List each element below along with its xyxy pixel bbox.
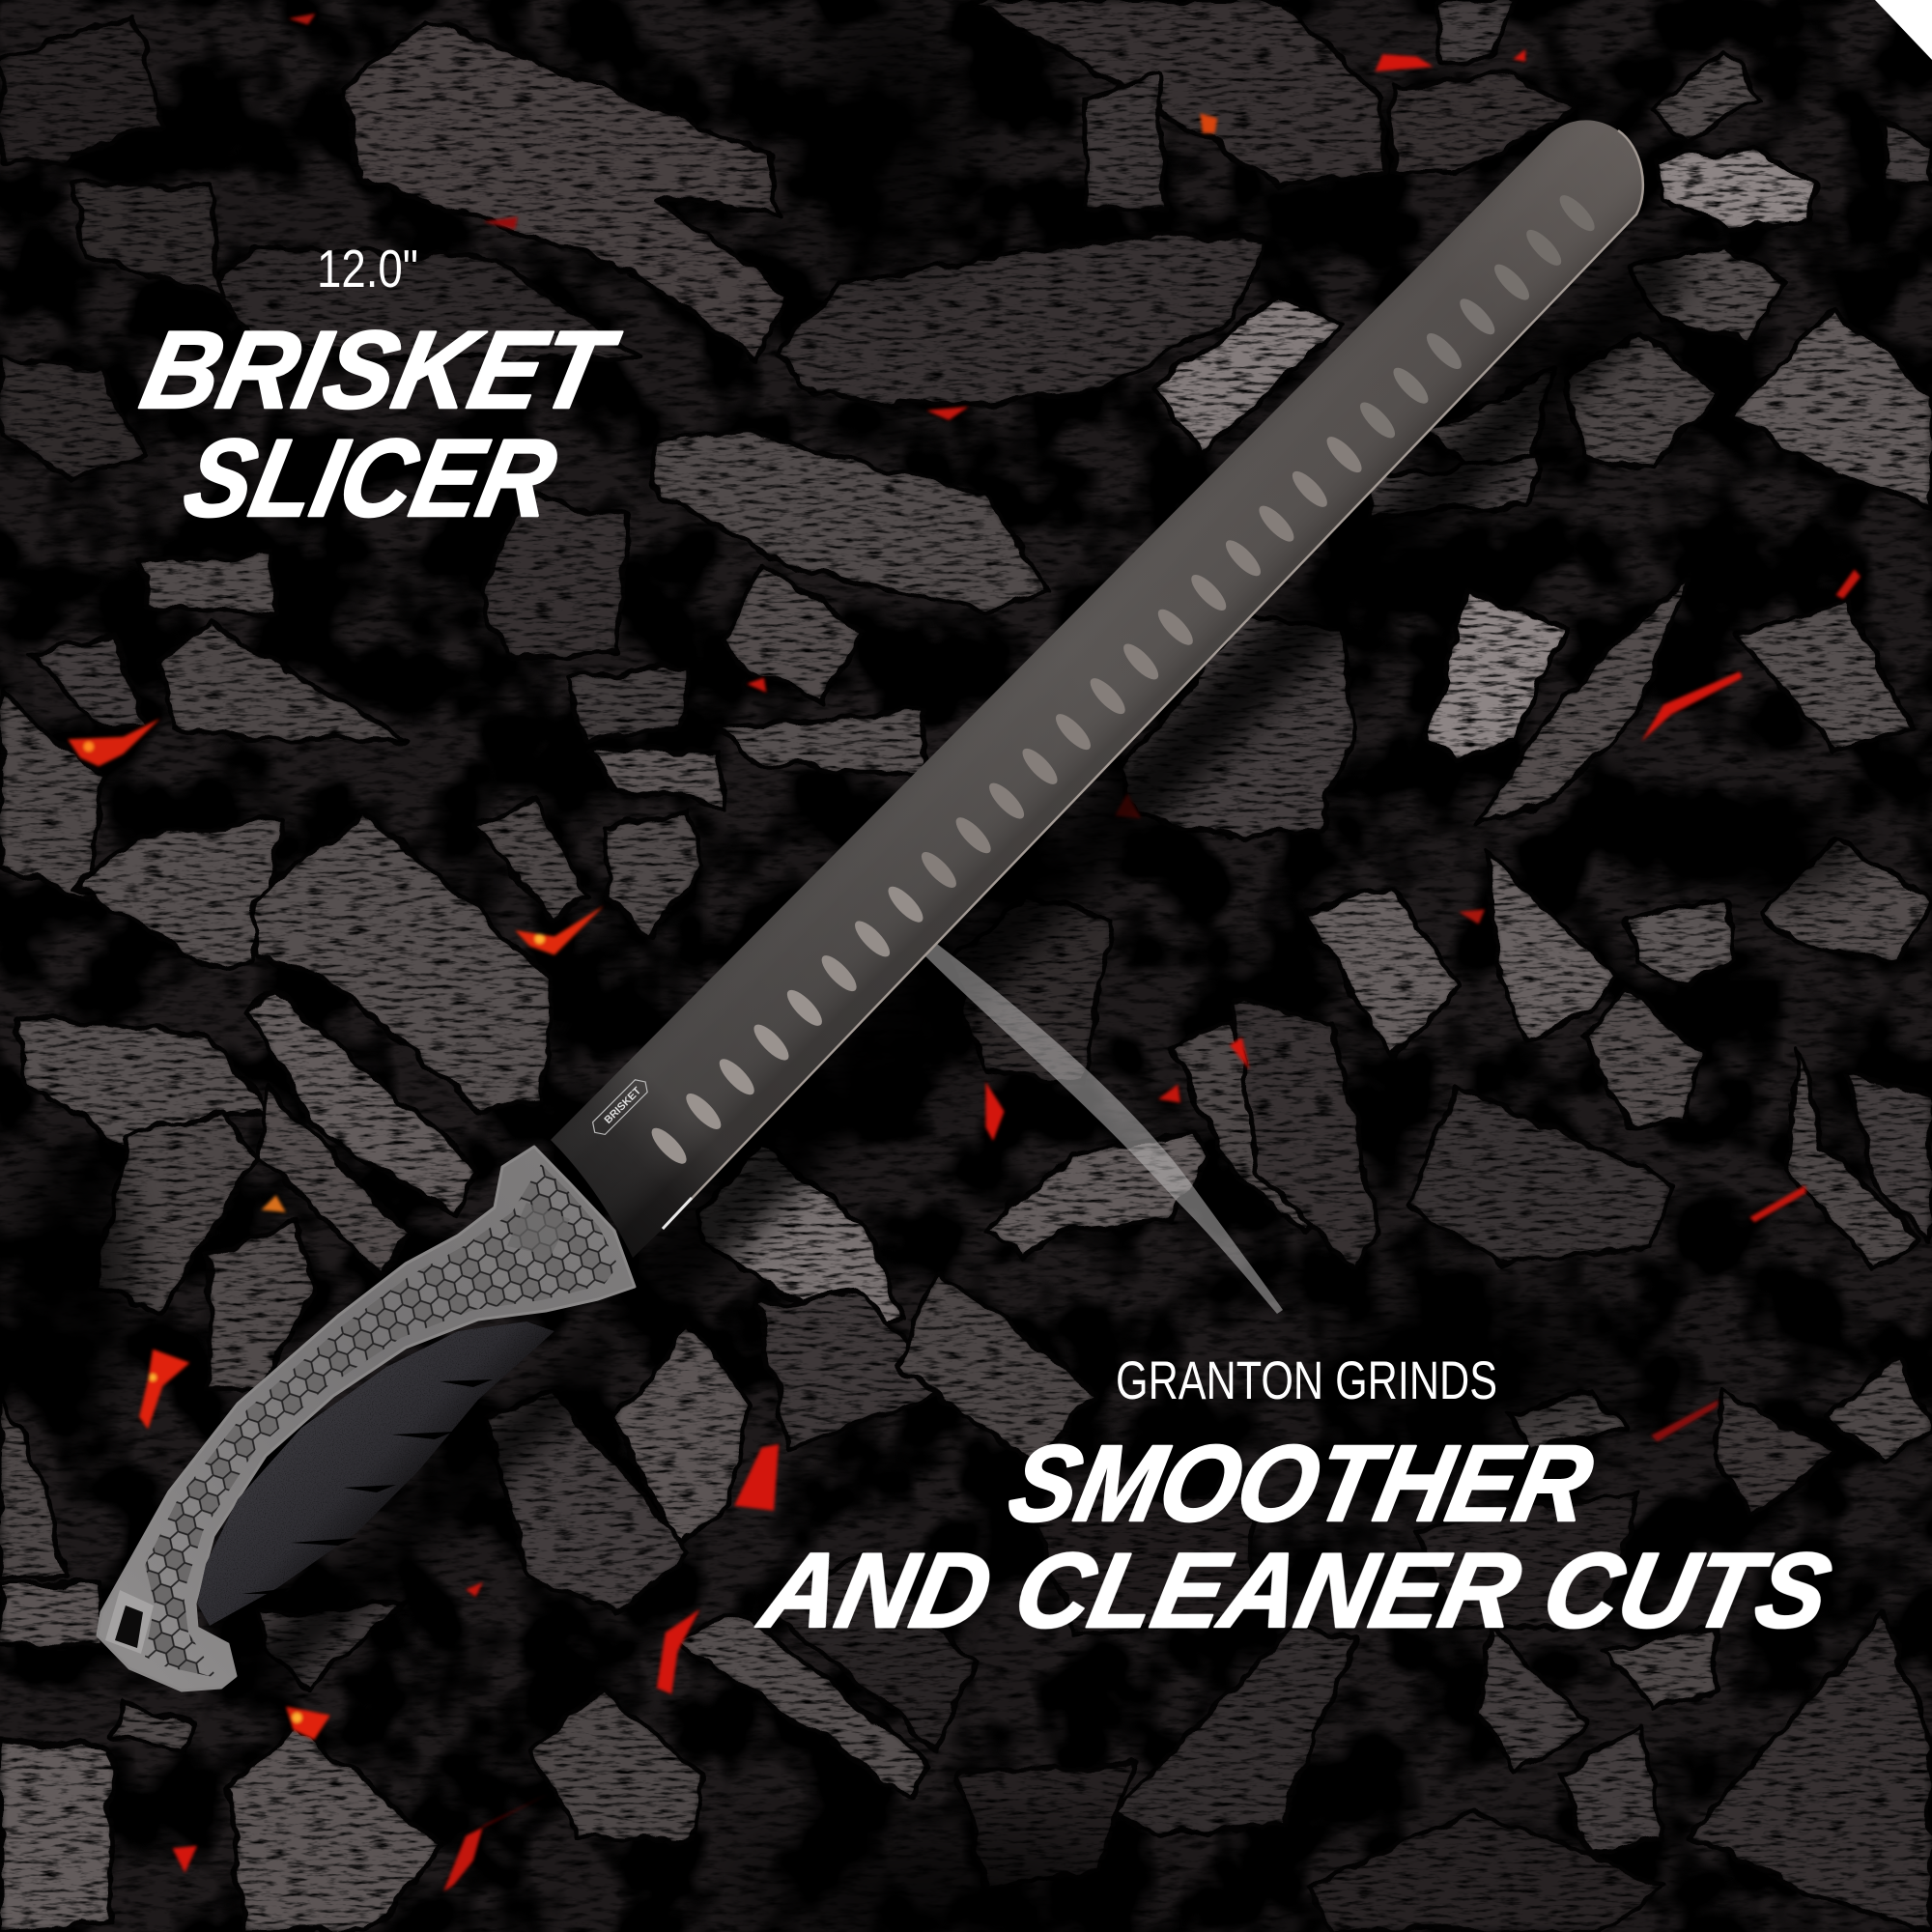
rubber grip: [197, 1321, 554, 1626]
annotation line: granton sweep: [913, 925, 1283, 1314]
heading: feature benefit: [750, 1422, 1840, 1650]
blade logo badge: [588, 1076, 651, 1139]
page corner fold: [1875, 0, 1932, 60]
heading: product name: BRISKET: [132, 309, 628, 432]
heading: feature benefit: AND CLEANER CUTS: [750, 1530, 1840, 1650]
granton grinds: [646, 190, 1600, 1169]
text: feature label: GRANTON GRINDS: [1116, 1350, 1497, 1410]
blade: [551, 120, 1643, 1258]
knife: [98, 120, 1643, 1690]
lanyard hole: [105, 1590, 154, 1654]
handle: [98, 1147, 635, 1690]
heading: product name: [132, 309, 628, 540]
knife shadow: [222, 232, 1690, 1700]
text: product size: 12.0": [317, 239, 418, 298]
hex texture band: [145, 1164, 618, 1678]
blade logo badge: BRISKET: [602, 1085, 643, 1126]
heading: product name: SLICER: [175, 417, 566, 540]
heading: feature benefit: SMOOTHER: [1000, 1422, 1603, 1544]
